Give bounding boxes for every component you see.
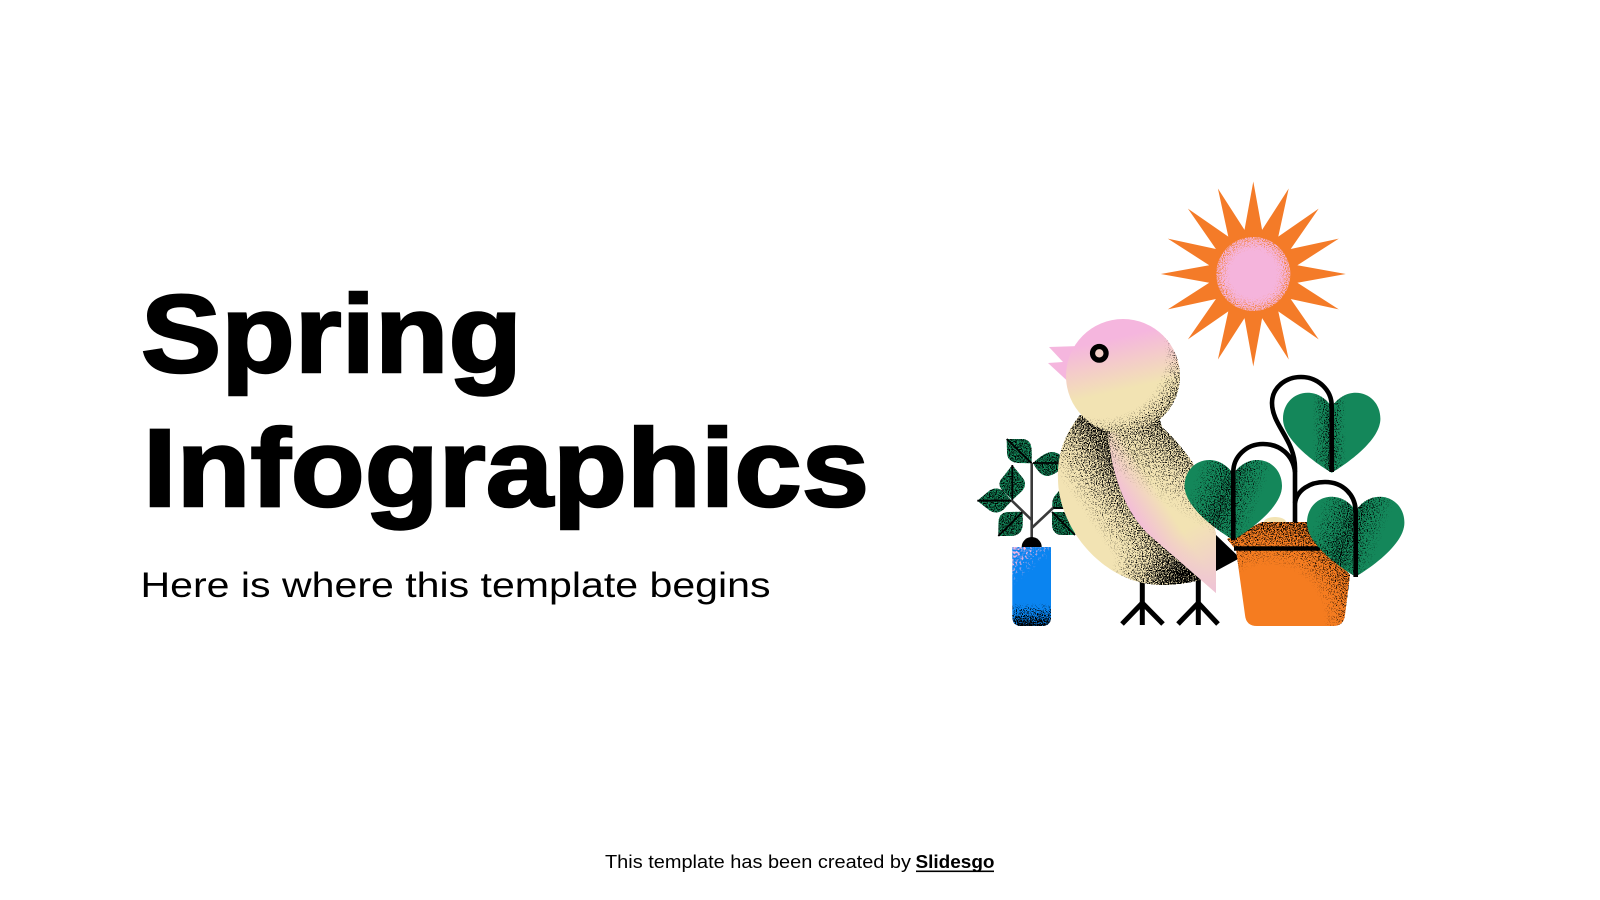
heart leaf: top	[1283, 393, 1380, 473]
heart leaf: right	[1307, 497, 1404, 577]
title	[141, 273, 869, 530]
credit line: This template has been created by	[605, 852, 911, 872]
title: Spring	[141, 273, 522, 396]
icon: bird	[1048, 319, 1240, 625]
icon: potted heart plant	[1185, 377, 1404, 626]
illustration: bird and plants	[977, 182, 1404, 626]
title: Infographics	[143, 407, 869, 530]
heart leaf: left	[1185, 460, 1282, 540]
slide	[142, 182, 1404, 872]
credit line: Slidesgo	[916, 852, 995, 872]
subtitle: Here is where this template begins	[140, 566, 770, 605]
icon: small potted plant	[977, 438, 1075, 626]
icon: sun	[1161, 182, 1346, 366]
